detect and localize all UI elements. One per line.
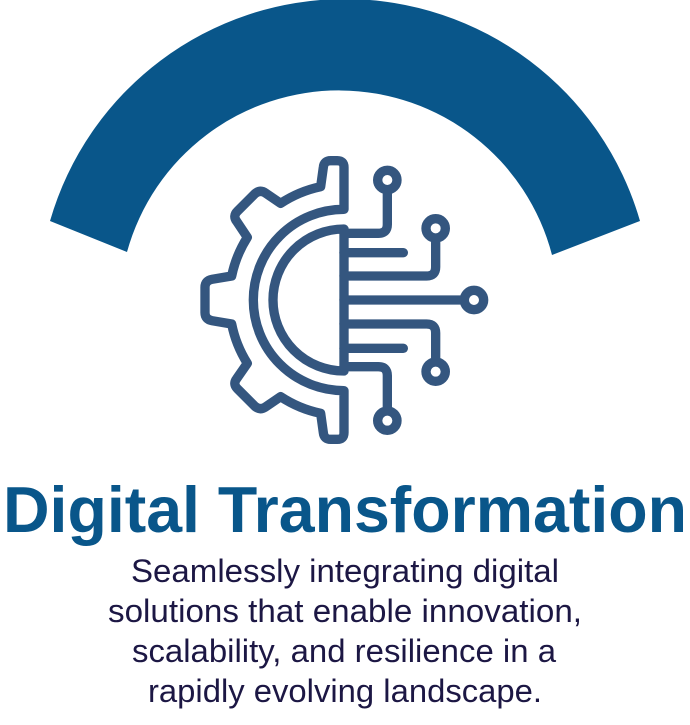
description text: Seamlessly integrating digital [131, 553, 559, 589]
icon: top circuit line and node [344, 170, 397, 233]
title: Digital Transformation [3, 473, 687, 546]
icon: upper short line [344, 239, 403, 267]
icon: gear half outline [205, 161, 344, 439]
description text: solutions that enable innovation, [108, 593, 582, 629]
icon: middle circuit line and node [344, 290, 484, 310]
description text: scalability, and resilience in a [132, 633, 556, 669]
icon: lower circuit line and node [344, 324, 445, 381]
arch banner [50, 0, 640, 255]
icon: half gear with circuit lines [205, 161, 484, 439]
icon: lower short line [344, 334, 403, 362]
icon: upper circuit line and node [344, 219, 445, 276]
description text [108, 553, 582, 709]
icon: inner half circle [273, 229, 344, 371]
description text: rapidly evolving landscape. [148, 673, 542, 709]
icon: bottom circuit line and node [344, 367, 397, 430]
